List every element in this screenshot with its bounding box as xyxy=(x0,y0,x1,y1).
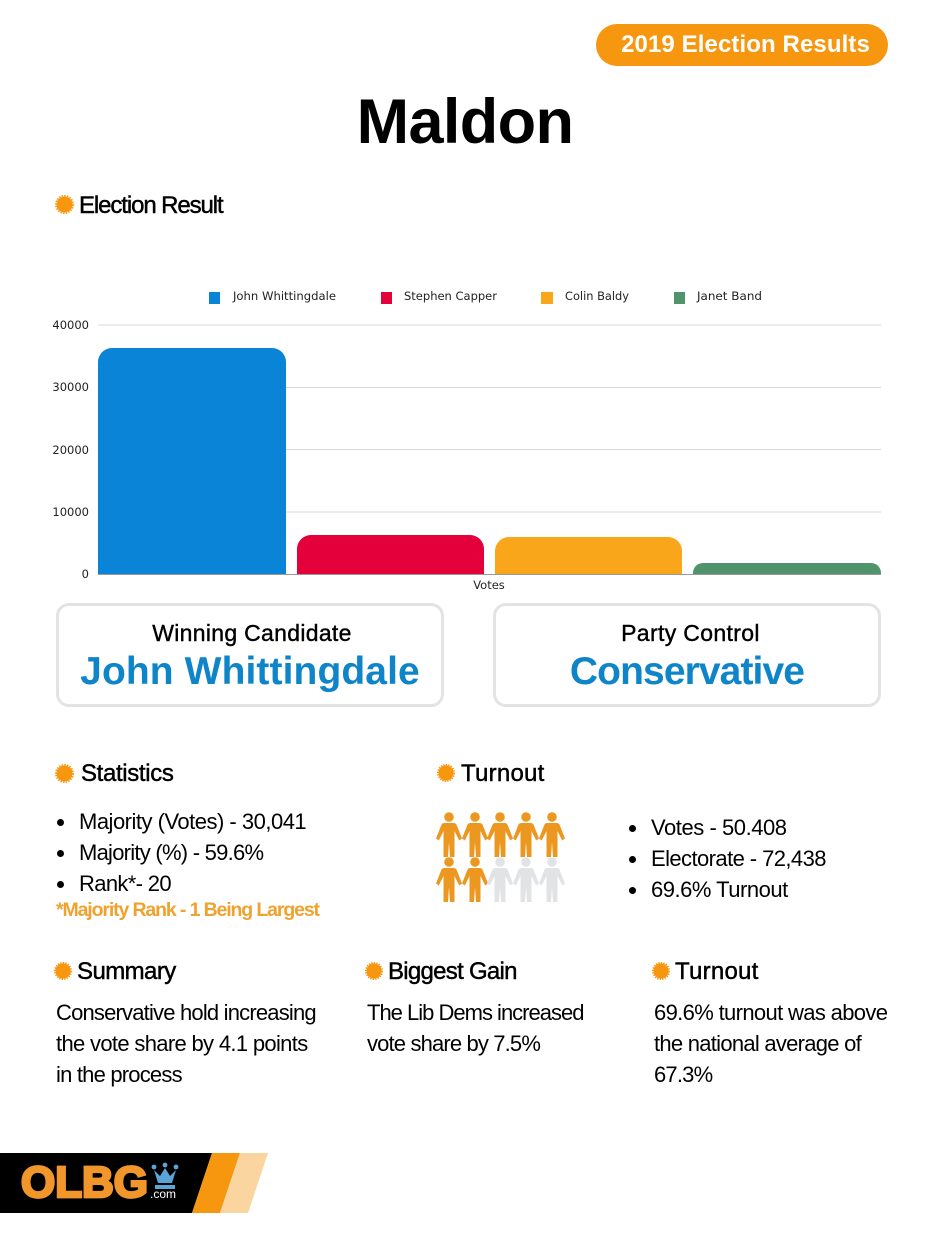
statistics list: Majority (%) - 59.6% xyxy=(79,840,263,865)
footnote: *Majority Rank - 1 Being Largest xyxy=(56,899,319,921)
heading: statistics: Statistics xyxy=(81,760,174,787)
gridlines and axis labels: 0 xyxy=(82,567,89,581)
turnout comparison text xyxy=(654,1000,887,1087)
summary text xyxy=(56,1000,316,1087)
statistics list xyxy=(57,809,306,896)
statistics list: Rank*- 20 xyxy=(79,871,171,896)
heading: turnout comparison: Turnout xyxy=(675,958,759,985)
chart legend: Stephen Capper xyxy=(404,289,497,303)
bars xyxy=(98,348,881,574)
turnout list: Votes - 50.408 xyxy=(651,815,787,840)
turnout list: Electorate - 72,438 xyxy=(651,846,826,871)
panel: party control xyxy=(493,603,881,707)
turnout list xyxy=(629,815,826,902)
gridlines and axis labels: 40000 xyxy=(52,318,89,332)
title: Maldon xyxy=(357,87,573,157)
panel: winning candidate xyxy=(56,603,444,707)
turnout comparison text: the national average of xyxy=(654,1031,861,1056)
domain: .com xyxy=(150,1187,176,1201)
chart legend: Janet Band xyxy=(696,289,762,303)
label: Winning Candidate xyxy=(152,620,352,646)
biggest gain text: The Lib Dems increased xyxy=(367,1000,583,1025)
gridlines and axis labels: 20000 xyxy=(52,443,89,457)
gridlines and axis labels xyxy=(52,318,881,581)
summary text: Conservative hold increasing xyxy=(56,1000,316,1025)
icon: crown xyxy=(152,1163,178,1189)
label: Party Control xyxy=(621,620,760,646)
logo: OLBG.com xyxy=(0,1153,268,1213)
icon: turnout pictogram, 7 of 10 people filled xyxy=(436,812,565,902)
gridlines and axis labels: 30000 xyxy=(52,380,89,394)
heading: summary: Summary xyxy=(77,958,176,985)
candidate name: John Whittingdale xyxy=(80,650,420,693)
heading: biggest gain: Biggest Gain xyxy=(388,958,517,985)
wordmark: OLBG xyxy=(21,1158,148,1207)
turnout comparison text: 67.3% xyxy=(654,1062,712,1087)
biggest gain text: vote share by 7.5% xyxy=(367,1031,540,1056)
statistics list: Majority (Votes) - 30,041 xyxy=(79,809,306,834)
bar chart xyxy=(52,289,881,592)
chart legend: Colin Baldy xyxy=(565,289,629,303)
summary text: in the process xyxy=(56,1062,182,1087)
party name: Conservative xyxy=(570,650,804,693)
badge: 2019 election results: 2019 Election Results xyxy=(621,31,870,58)
gridlines and axis labels: 10000 xyxy=(52,505,89,519)
heading: turnout: Turnout xyxy=(461,760,545,787)
biggest gain text xyxy=(367,1000,584,1056)
chart legend xyxy=(209,289,762,304)
heading: election result: Election Result xyxy=(79,192,223,219)
chart legend: John Whittingdale xyxy=(232,289,336,303)
summary text: the vote share by 4.1 points xyxy=(56,1031,308,1056)
axis title: Votes xyxy=(473,578,505,592)
turnout list: 69.6% Turnout xyxy=(651,877,788,902)
turnout comparison text: 69.6% turnout was above xyxy=(654,1000,887,1025)
badge: 2019 election results xyxy=(596,24,888,66)
